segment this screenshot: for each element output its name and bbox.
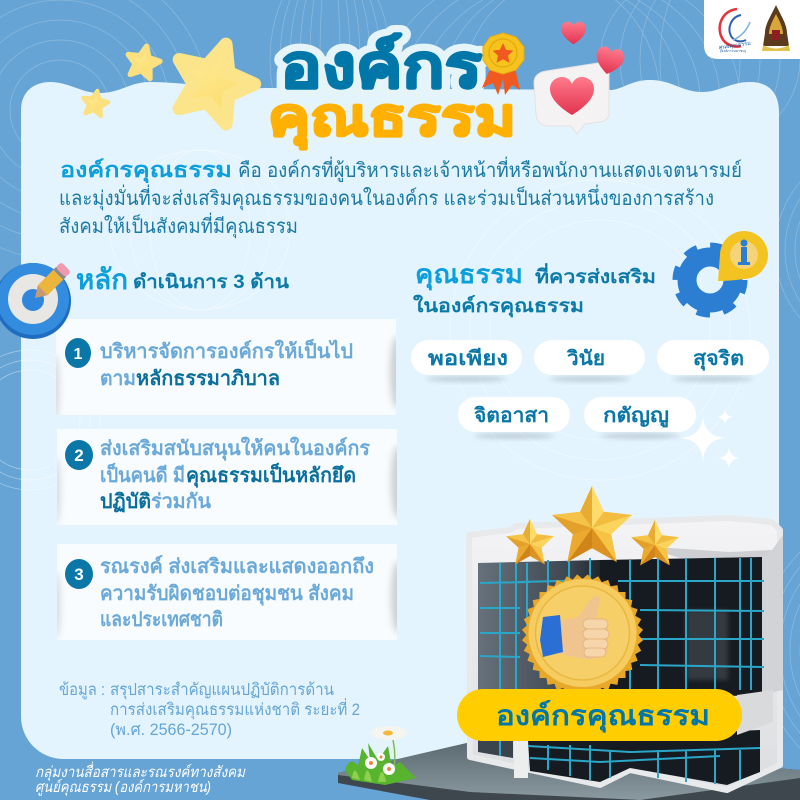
heading word: คุณธรรม: คุณธรรม <box>415 259 523 291</box>
definition line 2: และมุ่งมั่นที่จะส่งเสริมคุณธรรมของคนในองค์กร และร่วมเป็นส่วนหนึ่งของการสร้าง <box>59 184 714 211</box>
icon: small yellow star lower <box>81 89 110 117</box>
windows lower <box>478 735 513 758</box>
title line: คุณธรรม: คุณธรรม <box>268 89 516 150</box>
logo box <box>704 0 800 59</box>
card 3 text <box>100 555 374 631</box>
source label: ข้อมูล : <box>59 681 105 700</box>
title line: คุณธรรม halo: คุณธรรม <box>268 89 516 150</box>
thumb <box>559 596 608 659</box>
icon: large yellow star <box>165 32 264 128</box>
footer credit <box>35 761 246 796</box>
ground platform <box>338 743 800 800</box>
icon: morality centre logo: ศูนย์คุณธรรม <box>718 40 752 51</box>
cuff <box>540 615 563 657</box>
front column <box>514 735 528 778</box>
source line 3: (พ.ศ. 2566-2570) <box>110 721 232 739</box>
number 3 <box>65 559 93 589</box>
title line: องค์กร: องค์กร <box>280 33 482 100</box>
heading: virtues to promote <box>413 259 656 318</box>
card 2 text: ร่วมกัน <box>151 491 211 513</box>
definition paragraph <box>59 156 742 239</box>
icon: building <box>469 518 783 790</box>
icon: heart speech bubble <box>534 63 609 134</box>
card 1 text <box>100 338 353 390</box>
card 1 text: หลักธรรมาภิบาล <box>136 368 280 390</box>
icon: target with pencil <box>0 262 71 339</box>
footer line 1: กลุ่มงานสื่อสารและรณรงค์ทางสังคม <box>35 761 246 781</box>
icon: heart right <box>593 45 626 77</box>
card 2 text: ส่งเสริมสนับสนุนให้คนในองค์กร <box>100 436 370 461</box>
right column <box>762 535 783 695</box>
fingers <box>583 619 609 657</box>
card 3 text: รณรงค์ ส่งเสริมและแสดงออกถึง <box>100 555 374 578</box>
pill: พอเพียง: พอเพียง <box>428 347 508 370</box>
number 3: 3 <box>74 565 84 584</box>
icon: flowers and grass <box>345 726 416 785</box>
pill: สุจริต: สุจริต <box>693 348 744 371</box>
heading rest line 1: ที่ควรส่งเสริม <box>535 263 656 288</box>
pill: กตัญญู: กตัญญู <box>603 405 669 429</box>
source citation <box>59 681 360 739</box>
source line 2: การส่งเสริมคุณธรรมแห่งชาติ ระยะที่ 2 <box>110 698 360 720</box>
card 3 text: ความรับผิดชอบต่อชุมชน สังคม <box>100 583 354 606</box>
number 1 <box>65 338 91 368</box>
number 1: 1 <box>74 346 83 363</box>
pill: organization label <box>457 689 742 741</box>
card 2 <box>52 429 405 525</box>
number 2 <box>65 440 93 470</box>
pill: สุจริต <box>657 340 769 382</box>
pill: จิตอาสา <box>458 397 570 439</box>
icon: morality centre logo: (องค์การมหาชน) <box>720 49 746 53</box>
panel faint line pattern <box>0 150 750 490</box>
building walls <box>469 518 780 790</box>
card 1 text: บริหารจัดการองค์กรให้เป็นไป <box>100 338 353 363</box>
heading line 2: ในองค์กรคุณธรรม <box>413 294 584 318</box>
heading rest: ดำเนินการ 3 ด้าน <box>133 271 289 293</box>
number 2: 2 <box>74 446 84 465</box>
windows upper <box>478 560 600 700</box>
pill: พอเพียง <box>411 340 522 382</box>
icon: sparkles <box>681 409 740 469</box>
icon: heart top <box>561 22 586 44</box>
icon: medal <box>482 33 524 95</box>
heading word: หลัก: หลัก <box>76 264 128 295</box>
card 1 <box>56 319 396 415</box>
source line 1: สรุปสาระสำคัญแผนปฏิบัติการด้าน <box>110 681 334 700</box>
title <box>268 33 516 150</box>
icon: gold stars <box>506 486 679 565</box>
icon: morality centre logo <box>718 9 752 53</box>
card 1 text: ตาม <box>100 368 136 390</box>
card 3 <box>52 544 405 640</box>
window reflection <box>686 610 728 680</box>
balcony band <box>737 690 773 735</box>
icon: gear with info bubble <box>677 231 768 313</box>
card 2 text: คุณธรรมเป็นหลักยึด <box>186 462 356 488</box>
pill: จิตอาสา: จิตอาสา <box>474 405 549 427</box>
pill: กตัญญู <box>584 397 696 439</box>
heading: three principles <box>76 264 289 295</box>
pill: organization label: องค์กรคุณธรรม <box>496 700 710 733</box>
window grid <box>480 558 764 784</box>
card 2 text: เป็นคนดี มี <box>100 462 185 487</box>
icon: royal crest emblem <box>762 5 790 51</box>
footer line 2: ศูนย์คุณธรรม (องค์การมหาชน) <box>35 778 211 796</box>
definition term: องค์กรคุณธรรม <box>60 158 232 184</box>
title line: องค์กร halo: องค์กร <box>280 33 482 100</box>
definition line 1: คือ องค์กรที่ผู้บริหารและเจ้าหน้าที่หรือพนักงานแสดงเจตนารมย์ <box>238 156 742 183</box>
card 2 text <box>100 436 370 513</box>
icon: gold seal with thumbs up <box>522 574 643 696</box>
card 2 text: ปฏิบัติ <box>100 491 151 513</box>
pill: วินัย <box>534 340 645 382</box>
icon: small yellow star upper <box>124 43 162 80</box>
card 3 text: และประเทศชาติ <box>100 609 223 631</box>
pill: วินัย: วินัย <box>566 348 605 370</box>
definition line 3: สังคมให้เป็นสังคมที่มีคุณธรรม <box>59 212 298 239</box>
roof shadow <box>640 546 772 558</box>
